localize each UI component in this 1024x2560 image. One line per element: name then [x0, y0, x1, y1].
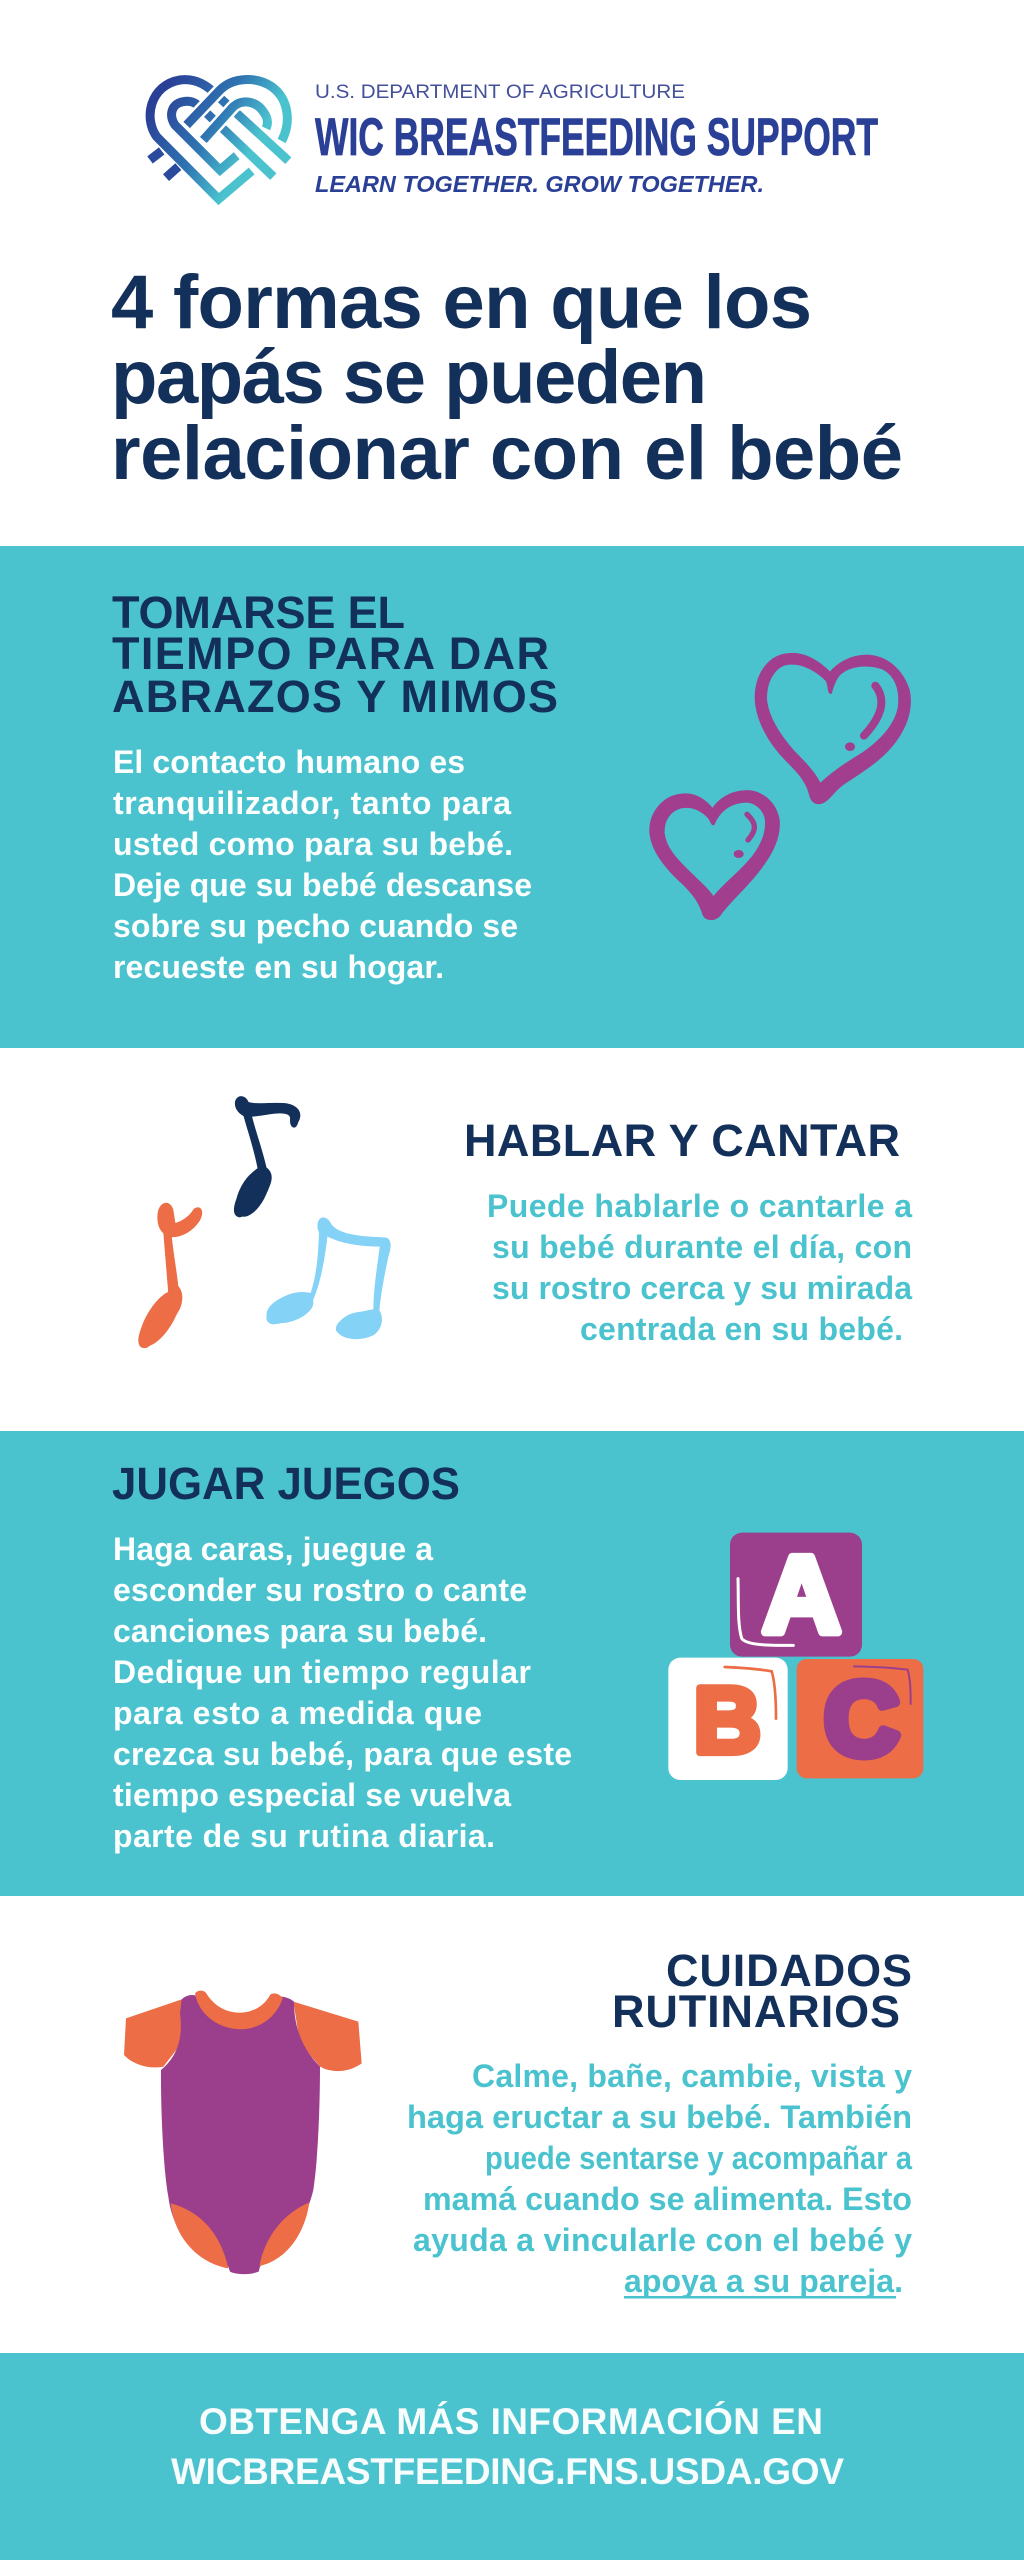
text block: haga caras: canciones para su bebé.	[113, 1613, 487, 1649]
text block: contacto humano	[113, 744, 532, 985]
text block: contacto humano: tranquilizador, tanto para	[113, 785, 511, 821]
heading: jugar juegos: JUGAR JUEGOS	[112, 1458, 460, 1509]
text block: hablarle o cantarle: su bebé durante el día, con	[492, 1229, 912, 1265]
text block: contacto humano: recueste en su hogar.	[113, 949, 444, 985]
text block: contacto humano: El contacto humano es	[113, 744, 465, 780]
icon: alphabet blocks: A	[763, 1534, 841, 1655]
icon: alphabet blocks: B	[694, 1668, 761, 1772]
title: 4 formas en que los	[111, 260, 812, 345]
icon: alphabet blocks: C	[824, 1660, 899, 1776]
text block: contacto humano: usted como para su bebé.	[113, 826, 513, 862]
text block: haga caras: tiempo especial se vuelva	[113, 1777, 511, 1813]
text block: hablarle o cantarle: centrada en su bebé.	[580, 1311, 903, 1347]
heading: cuidados rutinarios: RUTINARIOS	[612, 1986, 900, 2037]
icon: woven heart	[150, 80, 288, 199]
icon: alphabet blocks	[668, 1533, 923, 1780]
heading: hablar y cantar: HABLAR Y CANTAR	[464, 1115, 900, 1166]
text: obtenga más información: OBTENGA MÁS INFORMACIÓN EN	[199, 2400, 823, 2442]
text block: haga caras: parte de su rutina diaria.	[113, 1818, 495, 1854]
text block: contacto humano: sobre su pecho cuando se	[113, 908, 518, 944]
text block: hablarle o cantarle: Puede hablarle o cantarle a	[487, 1188, 912, 1224]
panel: footer call to action	[0, 2353, 1024, 2560]
text block: contacto humano: Deje que su bebé descanse	[113, 867, 532, 903]
text block: calme, bañe: mamá cuando se alimenta. Esto	[423, 2181, 912, 2217]
text block: calme, bañe: puede sentarse y acompañar a	[485, 2140, 912, 2176]
text block: haga caras: para esto a medida que	[113, 1695, 482, 1731]
icon: two hearts	[651, 654, 910, 919]
text block: haga caras: Haga caras, juegue a	[113, 1531, 433, 1567]
text block: calme, bañe: apoya a su pareja.	[624, 2263, 903, 2299]
logo: WIC Breastfeeding Support	[150, 80, 878, 199]
text block: calme, bañe: haga eructar a su bebé. También	[407, 2099, 912, 2135]
heading: tomarse el tiempo: TOMARSE EL	[112, 587, 405, 638]
text block: hablarle o cantarle: su rostro cerca y su mirada	[492, 1270, 912, 1306]
text block: calme, bañe: ayuda a vincularle con el bebé y	[413, 2222, 912, 2258]
text block: calme, bañe	[407, 2058, 912, 2299]
title	[111, 260, 903, 496]
text block: hablarle o cantarle	[487, 1188, 912, 1347]
heading: cuidados rutinarios: CUIDADOS	[666, 1945, 912, 1996]
text: U.S. Department of Agriculture: U.S. DEPARTMENT OF AGRICULTURE	[315, 82, 685, 103]
heading: cuidados rutinarios	[612, 1945, 912, 2037]
text block: calme, bañe: Calme, bañe, cambie, vista y	[472, 2058, 912, 2094]
heading: tomarse el tiempo	[112, 587, 558, 722]
panel: hablar y cantar	[134, 1098, 912, 1350]
text block: haga caras	[113, 1531, 572, 1854]
panel: cuidados rutinarios	[124, 1945, 912, 2299]
icon: music notes	[134, 1098, 389, 1350]
title: papás se pueden	[111, 335, 707, 420]
text: tagline: LEARN TOGETHER. GROW TOGETHER.	[315, 171, 764, 197]
icon: baby onesie	[124, 1991, 362, 2274]
text block: haga caras: Dedique un tiempo regular	[113, 1654, 531, 1690]
text block: haga caras: esconder su rostro o cante	[113, 1572, 527, 1608]
heading: tomarse el tiempo: ABRAZOS Y MIMOS	[112, 671, 558, 722]
panel: jugar juegos	[0, 1431, 1024, 1896]
title: relacionar con el bebé	[111, 411, 903, 496]
text: website address: WICBREASTFEEDING.FNS.USDA.GOV	[171, 2451, 844, 2492]
text block: haga caras: crezca su bebé, para que este	[113, 1736, 572, 1772]
heading: tomarse el tiempo: TIEMPO PARA DAR	[112, 628, 549, 679]
panel: abrazos y mimos	[0, 546, 1024, 1048]
